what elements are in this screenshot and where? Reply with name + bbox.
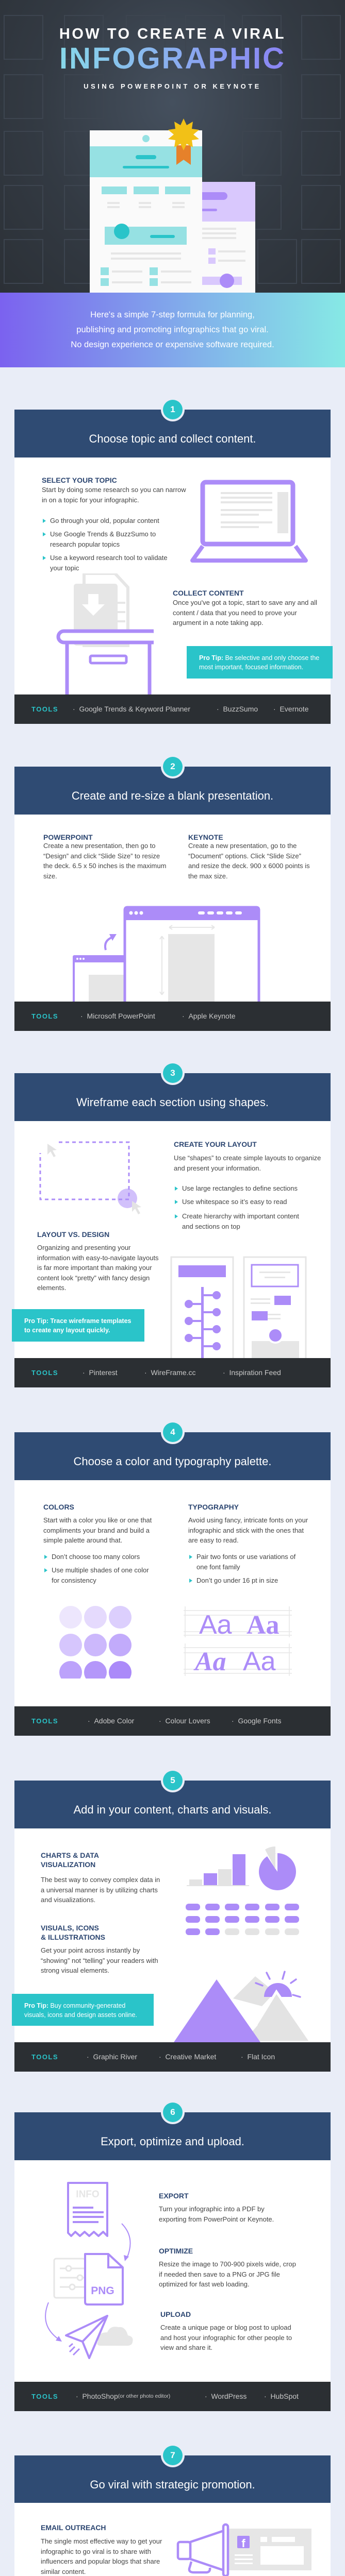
panel 2: Create a new presentation, go to the “Document” options. Click “Slide Size” and resize the deck. 900 x 6000 points is the max size. bbox=[188, 842, 310, 880]
panel 2: Create a new presentation, then go to “Design” and click “Slide Size” to resize the deck. 6.5 x 50 inches is the maximum size. bbox=[43, 842, 166, 880]
header 2 bbox=[14, 767, 331, 815]
title: HOW TO CREATE A VIRAL bbox=[59, 26, 286, 42]
panel 4: TYPOGRAPHY bbox=[188, 1503, 239, 1511]
number 2 bbox=[161, 755, 185, 778]
panel 3: Use whitespace so it’s easy to read bbox=[182, 1198, 287, 1206]
panel 1: Once you've got a topic, start to save any and all content / data that you need to prove your argument in a note taking app. bbox=[173, 599, 317, 626]
panel 6: UPLOAD bbox=[160, 2310, 191, 2318]
typography samples: Aa bbox=[193, 1647, 226, 1676]
tools 5: · Graphic River bbox=[87, 2053, 137, 2061]
number 2: 2 bbox=[170, 761, 175, 771]
tools 5: TOOLS bbox=[31, 2053, 58, 2061]
panel 5: CHARTS & DATA bbox=[41, 1851, 99, 1859]
panel 7 bbox=[14, 2503, 331, 2576]
header 4: Choose a color and typography palette. bbox=[73, 1455, 272, 1468]
section 4 bbox=[14, 1422, 331, 1736]
panel 3: Organizing and presenting your information with easy-to-navigate layouts is far more important than making your content look “pretty” with fancy design elements. bbox=[37, 1244, 159, 1292]
section 3 bbox=[12, 1063, 331, 1387]
panel 5: Get your point across instantly by “showing” not “telling” your readers with strong visual elements. bbox=[41, 1946, 158, 1974]
tools 3: · Inspiration Feed bbox=[223, 1368, 281, 1377]
number 3 bbox=[161, 1061, 185, 1085]
number 5 bbox=[161, 1769, 185, 1792]
panel 7: EMAIL OUTREACH bbox=[41, 2523, 106, 2532]
tools 5 bbox=[14, 2042, 331, 2072]
section 6 bbox=[14, 2103, 331, 2411]
megaphone and envelope bbox=[176, 2523, 311, 2576]
illustration: dashed selection bbox=[39, 1142, 141, 1214]
panel 1: Use a keyword research tool to validate your topic bbox=[50, 554, 168, 572]
panel 3: Create hierarchy with important content and sections on top bbox=[182, 1212, 299, 1230]
panel 5: VISUALS, ICONS bbox=[41, 1924, 99, 1932]
tools 6: · HubSpot bbox=[264, 2392, 299, 2400]
panel 3 bbox=[14, 1121, 331, 1358]
panel 1: COLLECT CONTENT bbox=[173, 589, 244, 597]
intro gradient band bbox=[0, 293, 345, 367]
panel 4: Don’t go under 16 pt in size bbox=[196, 1577, 278, 1584]
panel 3: Use large rectangles to define sections bbox=[182, 1184, 298, 1192]
tools 1: · BuzzSumo bbox=[217, 705, 258, 713]
title: USING POWERPOINT OR KEYNOTE bbox=[84, 82, 261, 90]
panel 2: KEYNOTE bbox=[188, 833, 223, 841]
pro tip 1: Pro Tip: Be selective and only choose the most important, focused information. bbox=[199, 654, 319, 671]
section 1 bbox=[14, 400, 333, 724]
panel 7: The single most effective way to get your infographic to go viral is to share with influencers and popular blogs that share similar content. bbox=[41, 2537, 162, 2575]
intro gradient band: publishing and promoting infographics that go viral. bbox=[76, 325, 269, 334]
tools 6: · PhotoShop bbox=[76, 2392, 118, 2400]
number 6: 6 bbox=[170, 2107, 175, 2117]
tools 4: TOOLS bbox=[31, 1717, 58, 1725]
tools 3: · WireFrame.cc bbox=[144, 1368, 196, 1377]
header 3: Wireframe each section using shapes. bbox=[76, 1096, 269, 1109]
panel 4: COLORS bbox=[43, 1503, 74, 1511]
header 6 bbox=[14, 2112, 331, 2160]
tools 1: TOOLS bbox=[31, 705, 58, 713]
tools 2: · Microsoft PowerPoint bbox=[80, 1012, 155, 1020]
export icons: INFO bbox=[76, 2189, 100, 2200]
hero illustration bbox=[90, 118, 255, 293]
panel 4 bbox=[14, 1480, 331, 1706]
header 3 bbox=[14, 1073, 331, 1121]
tools 1: · Google Trends & Keyword Planner bbox=[73, 705, 190, 713]
header 4 bbox=[14, 1432, 331, 1480]
illustration: resize windows bbox=[73, 906, 260, 1002]
pro tip 1 bbox=[187, 646, 333, 679]
tools 4: · Colour Lovers bbox=[159, 1717, 210, 1725]
tools 4: · Google Fonts bbox=[232, 1717, 282, 1725]
panel 6: Create a unique page or blog post to upload and host your infographic for other people to view and share it. bbox=[160, 2324, 292, 2351]
color swatches bbox=[59, 1606, 132, 1679]
section 7 bbox=[14, 2446, 331, 2576]
typography samples: Aa bbox=[243, 1647, 276, 1676]
number 6 bbox=[161, 2100, 185, 2124]
number 1 bbox=[161, 398, 185, 421]
number 7: 7 bbox=[170, 2450, 175, 2460]
panel 5: VISUALIZATION bbox=[41, 1860, 95, 1869]
header 2: Create and re-size a blank presentation. bbox=[72, 789, 273, 802]
tools 4: · Adobe Color bbox=[88, 1717, 134, 1725]
illustration: wireframes bbox=[170, 1256, 306, 1358]
panel 1: Start by doing some research so you can narrow in on a topic for your infographic. bbox=[42, 486, 186, 504]
tools 6: TOOLS bbox=[31, 2393, 58, 2400]
number 4: 4 bbox=[170, 1427, 175, 1437]
panel 1: Go through your old, popular content bbox=[50, 517, 159, 524]
title bbox=[59, 26, 286, 90]
panel 6: Resize the image to 700-900 pixels wide, crop if needed then save to a PNG or JPG file optimized for fast web loading. bbox=[159, 2260, 296, 2288]
header 6: Export, optimize and upload. bbox=[101, 2135, 244, 2148]
tools 1: · Evernote bbox=[273, 705, 308, 713]
export icons bbox=[45, 2182, 133, 2360]
number 4 bbox=[161, 1420, 185, 1444]
panel 4: Use multiple shades of one color for consistency bbox=[52, 1566, 149, 1584]
typography samples bbox=[184, 1606, 292, 1676]
panel 5: The best way to convey complex data in a universal manner is by utilizing charts and visualizations. bbox=[41, 1876, 160, 1904]
header 1: Choose topic and collect content. bbox=[89, 432, 256, 445]
panel 4: Don’t choose too many colors bbox=[52, 1553, 140, 1561]
typography samples: Aa bbox=[199, 1610, 232, 1640]
tools 6: (or other photo editor) bbox=[118, 2393, 170, 2399]
header 1 bbox=[14, 410, 331, 457]
panel 4: Start with a color you like or one that compliments your brand and build a simple palette around that. bbox=[43, 1516, 152, 1544]
tools 2: TOOLS bbox=[31, 1012, 58, 1020]
section 2 bbox=[14, 757, 331, 1031]
pro tip 3 bbox=[12, 1309, 144, 1342]
number 3: 3 bbox=[170, 1068, 175, 1078]
intro gradient band: No design experience or expensive software required. bbox=[71, 340, 274, 349]
chart illustrations bbox=[174, 1846, 308, 2042]
panel 1: Use Google Trends & BuzzSumo to research popular topics bbox=[50, 530, 156, 548]
pro tip 5 bbox=[12, 1994, 154, 2026]
panel 6: EXPORT bbox=[159, 2192, 189, 2200]
tools 3 bbox=[14, 1358, 331, 1387]
tools 3: TOOLS bbox=[31, 1369, 58, 1377]
panel 6: Turn your infographic into a PDF by exporting from PowerPoint or Keynote. bbox=[159, 2205, 274, 2223]
megaphone and envelope: f bbox=[241, 2537, 245, 2550]
pro tip 5: Pro Tip: Buy community-generated visuals, icons and design assets online. bbox=[24, 2002, 137, 2019]
panel 2: POWERPOINT bbox=[43, 833, 93, 841]
title: INFOGRAPHIC bbox=[59, 42, 286, 75]
panel 4: Pair two fonts or use variations of one font family bbox=[196, 1553, 295, 1570]
section 5 bbox=[12, 1771, 331, 2072]
panel 3: Use “shapes” to create simple layouts to organize and present your information. bbox=[174, 1154, 321, 1172]
panel 6 bbox=[14, 2160, 331, 2382]
panel 1 bbox=[14, 457, 331, 694]
panel 6: OPTIMIZE bbox=[159, 2247, 193, 2255]
number 7 bbox=[161, 2444, 185, 2467]
tools 5: · Flat Icon bbox=[241, 2053, 275, 2061]
number 5: 5 bbox=[170, 1775, 175, 1785]
tools 1 bbox=[14, 694, 331, 724]
intro gradient band: Here's a simple 7-step formula for planning, bbox=[90, 310, 255, 319]
tools 4 bbox=[14, 1706, 331, 1736]
header 7: Go viral with strategic promotion. bbox=[90, 2478, 255, 2491]
tools 3: · Pinterest bbox=[83, 1368, 118, 1377]
panel 2 bbox=[14, 815, 331, 1002]
export icons: PNG bbox=[91, 2285, 114, 2297]
number 1: 1 bbox=[170, 404, 175, 414]
panel 5: & ILLUSTRATIONS bbox=[41, 1933, 105, 1941]
icon: archive box bbox=[57, 573, 154, 694]
typography samples: Aa bbox=[247, 1611, 280, 1640]
panel 3: CREATE YOUR LAYOUT bbox=[174, 1140, 257, 1148]
tools 6 bbox=[14, 2382, 331, 2411]
panel 3: LAYOUT VS. DESIGN bbox=[37, 1230, 109, 1239]
tools 5: · Creative Market bbox=[159, 2053, 216, 2061]
panel 5 bbox=[14, 1828, 331, 2042]
header 7 bbox=[14, 2455, 331, 2503]
tools 6: · WordPress bbox=[205, 2392, 247, 2400]
tools 2: · Apple Keynote bbox=[182, 1012, 236, 1020]
header 5: Add in your content, charts and visuals. bbox=[73, 1803, 271, 1816]
tools 2 bbox=[14, 1002, 331, 1031]
icon: laptop bbox=[190, 480, 308, 563]
header 5 bbox=[14, 1781, 331, 1828]
hero background bbox=[0, 0, 345, 293]
pro tip 3: Pro Tip: Trace wireframe templates to create any layout quickly. bbox=[24, 1317, 131, 1334]
panel 4: Avoid using fancy, intricate fonts on your infographic and stick with the ones that are easy to read. bbox=[188, 1516, 308, 1544]
panel 1: SELECT YOUR TOPIC bbox=[42, 476, 117, 484]
